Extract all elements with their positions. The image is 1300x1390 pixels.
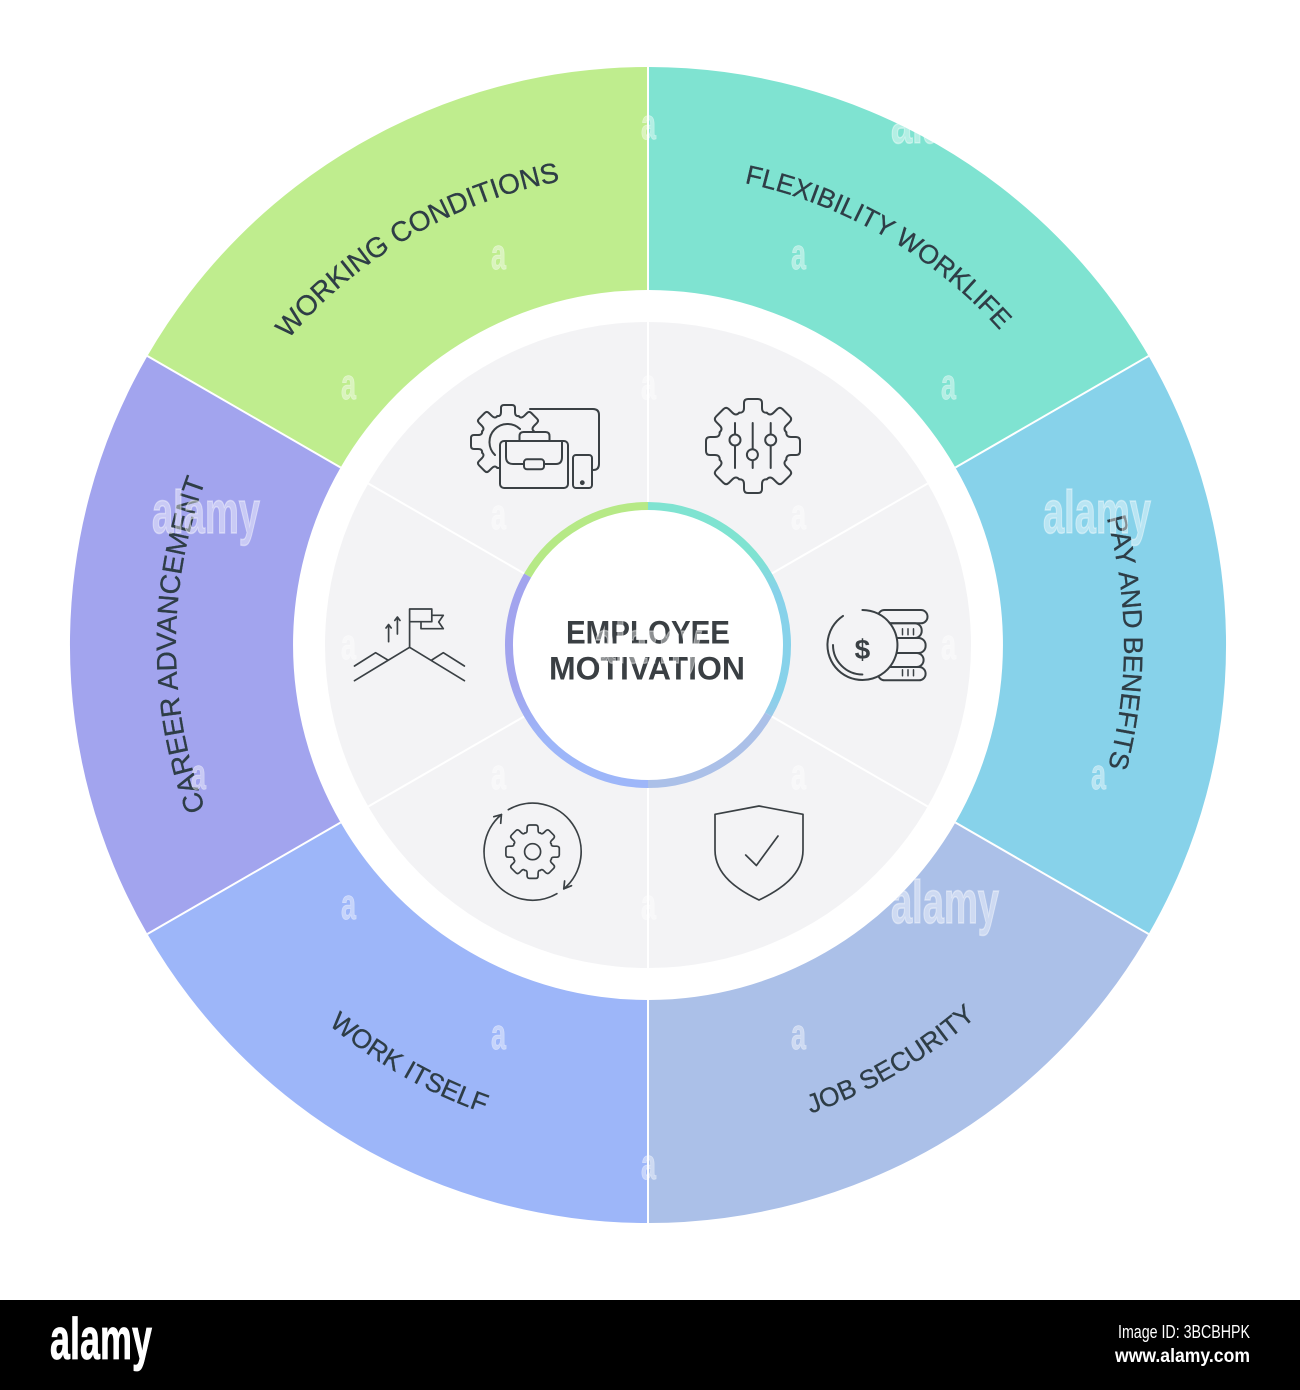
watermark: repeated marks <box>152 89 1151 1189</box>
watermark: repeated marks: a <box>791 1010 806 1059</box>
watermark: repeated marks: a <box>941 360 956 409</box>
icon: gear with sliders <box>706 399 800 493</box>
icon: coins and dollar: $ <box>855 634 871 665</box>
label: job security: JOB SECURITY <box>809 1003 971 1112</box>
watermark: repeated marks: a <box>1091 750 1106 799</box>
watermark: repeated marks: a <box>491 490 506 539</box>
segment: work itself <box>147 822 647 1223</box>
watermark: repeated marks: a <box>791 750 806 799</box>
segment: working conditions <box>147 67 647 468</box>
icon: rotating gear <box>484 803 581 900</box>
segment: career advancement <box>70 356 341 934</box>
watermark: repeated marks: a <box>941 620 956 669</box>
watermark: repeated marks: a <box>491 1010 506 1059</box>
inner panel: gray wheel <box>325 322 971 968</box>
watermark: repeated marks: a <box>791 230 806 279</box>
label: working conditions: WORKING CONDITIONS <box>274 163 558 336</box>
watermark: repeated marks: a <box>341 620 356 669</box>
watermark: repeated marks: alamy <box>1043 479 1151 546</box>
watermark: repeated marks: a <box>491 230 506 279</box>
watermark: repeated marks: alamy <box>152 479 260 546</box>
label: career advancement: CAREER ADVANCEMENT <box>156 474 204 812</box>
segment: job security <box>649 822 1149 1223</box>
icon: mountain with flag <box>354 609 464 681</box>
watermark: repeated marks: a <box>191 750 206 799</box>
label: work itself: WORK ITSELF <box>332 1010 490 1110</box>
footer bar: alamy <box>50 1307 152 1372</box>
footer bar: www.alamy.com <box>1114 1346 1250 1367</box>
watermark: repeated marks: a <box>341 880 356 929</box>
watermark: repeated marks: a <box>641 1140 656 1189</box>
center title: EMPLOYEE <box>566 614 730 650</box>
center title <box>549 614 745 686</box>
center ring <box>509 506 787 784</box>
label: flexibility worklife: FLEXIBILITY WORKLIFE <box>746 165 1012 330</box>
label: pay and benefits: PAY AND BENEFITS <box>1107 515 1143 770</box>
icon: coins and dollar <box>827 610 928 680</box>
watermark: repeated marks: alamy <box>891 89 999 156</box>
watermark: repeated marks: a <box>791 490 806 539</box>
icon: gear, briefcase and devices <box>471 405 599 488</box>
watermark: repeated marks: a <box>641 100 656 149</box>
segment: flexibility worklife <box>649 67 1149 468</box>
icon: shield with check <box>715 806 803 900</box>
watermark: repeated marks: a <box>641 880 656 929</box>
watermark: repeated marks: alamy <box>594 609 702 676</box>
watermark: repeated marks: alamy <box>891 869 999 936</box>
footer bar <box>0 1300 1300 1390</box>
watermark: repeated marks: a <box>641 360 656 409</box>
watermark: repeated marks: a <box>491 750 506 799</box>
footer bar: Image ID: 3BCBHPK <box>1118 1322 1250 1342</box>
center title: MOTIVATION <box>549 650 745 686</box>
watermark: repeated marks: a <box>341 360 356 409</box>
segment: pay and benefits <box>955 356 1226 934</box>
